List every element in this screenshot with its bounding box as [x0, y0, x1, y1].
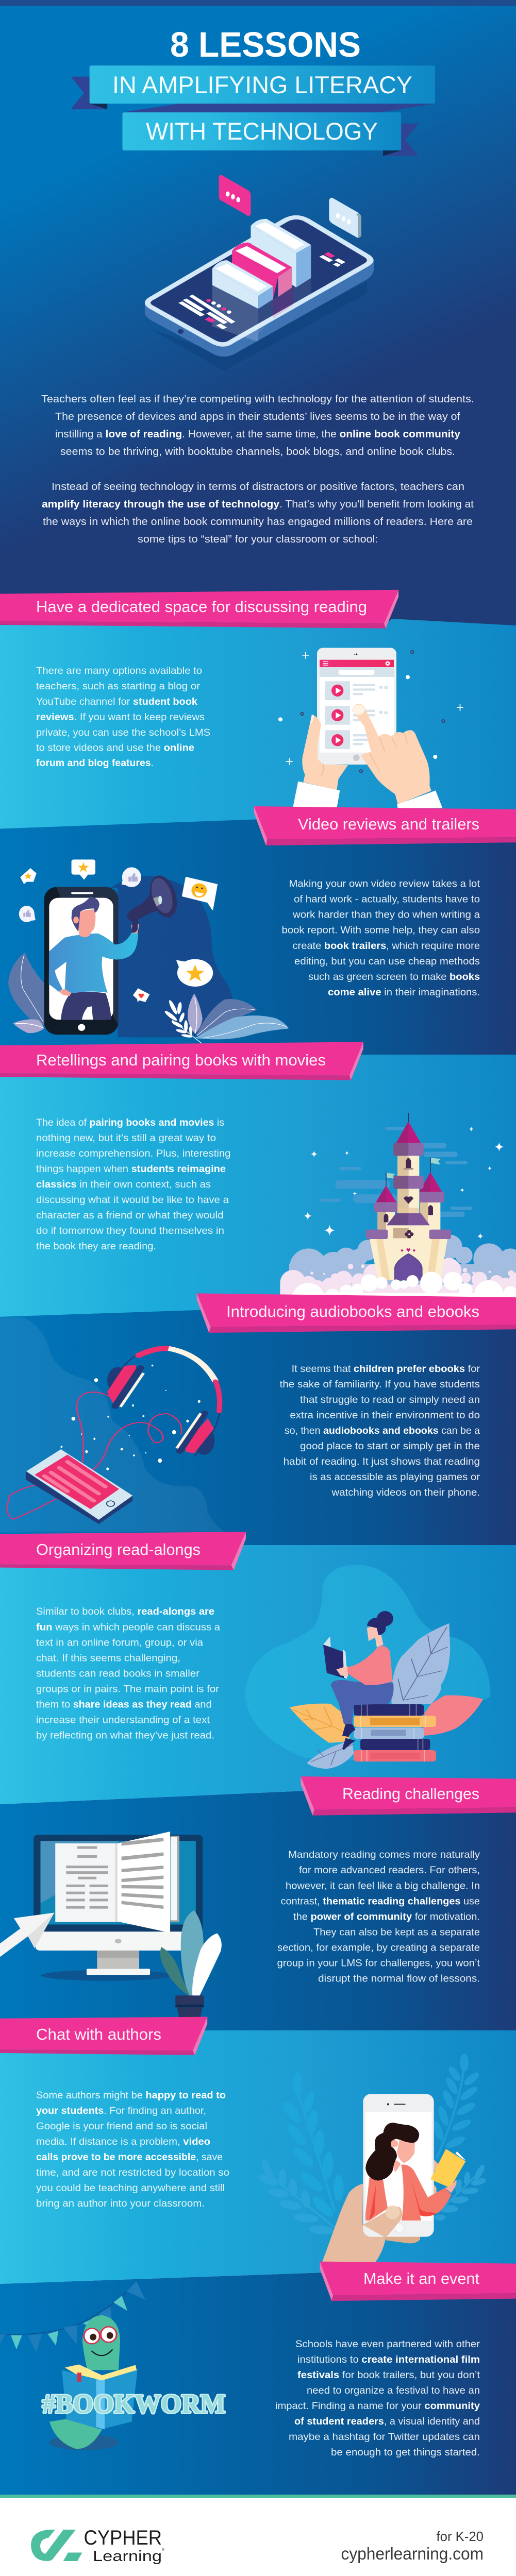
text: video reviews body: such as green screen to make books: [308, 972, 480, 982]
text: video reviews body: come alive in their imaginations.: [328, 987, 480, 998]
text: read-alongs body: by reflecting on what they’ve just read.: [36, 1730, 214, 1741]
text: read-alongs body: Similar to book clubs, read-alongs are: [36, 1606, 214, 1617]
text: make it an event body: impact. Finding a name for your community: [275, 2401, 480, 2412]
heading: introducing audiobooks: Introducing audiobooks and ebooks: [226, 1302, 479, 1320]
heading: reading challenges: Reading challenges: [342, 1785, 479, 1803]
label: bookworm hashtag: #BOOKWORM: [42, 2389, 225, 2419]
text: introduction: some tips to “steal” for your classroom or school:: [138, 534, 378, 545]
text: reading challenges body: however, it can feel like a big challenge. In: [286, 1880, 480, 1892]
logo wordmark: Learning: [93, 2548, 162, 2565]
text: audiobooks body: that struggle to read or simply need an: [300, 1395, 480, 1405]
panel: retellings and pairing books with movies: [0, 1042, 516, 1323]
text: introduction: The presence of devices and apps in their students’ lives seems to be in the way of: [55, 411, 460, 422]
text: audiobooks body: extra incentive in their environment to do: [290, 1410, 480, 1421]
text: dedicated space body: [36, 666, 210, 769]
text: chat with authors body: bring an author into your classroom.: [36, 2198, 205, 2209]
text: video reviews body: create book trailers , which require more: [293, 941, 480, 952]
text: chat with authors body: you could be teaching anywhere and still: [36, 2183, 225, 2194]
text: chat with authors body: media. If distance is a problem, video: [36, 2137, 210, 2147]
icon: heart bubble: [133, 988, 149, 1003]
text: dedicated space body: private, you can use the school’s LMS: [36, 727, 210, 738]
text: introduction: Teachers often feel as if they’re competing with technology for the attention of students.: [41, 394, 474, 405]
panel: footer: [0, 2495, 516, 2576]
banner: reading challenges: [301, 1776, 516, 1816]
text: read-alongs body: fun ways in which people can discuss a: [36, 1622, 220, 1633]
text: read-alongs body: groups or in pairs. The main point is for: [36, 1684, 220, 1695]
text: chat with authors body: time, and are not restricted by location so: [36, 2167, 229, 2178]
text: make it an event body: [275, 2339, 480, 2458]
text: video reviews body: editing, but you can use cheap methods: [294, 956, 480, 967]
text: introduction: instilling a love of reading . However, at the same time, the online book community: [55, 429, 461, 440]
text: video reviews body: [281, 879, 480, 998]
text: read-alongs body: students can read books in smaller: [36, 1668, 200, 1680]
illustration: headphones and phone: [0, 1317, 224, 1532]
banner: chat with authors: [0, 2017, 207, 2055]
banner: make it an event: [320, 2262, 516, 2301]
text: make it an event body: festivals for book trailers, but you don’t: [297, 2370, 480, 2381]
illustration: isometric phone with books: [145, 175, 374, 371]
text: retellings body: character as a friend or what they would: [36, 1210, 224, 1221]
heading: retellings: Retellings and pairing books with movies: [36, 1051, 326, 1069]
text: reading challenges body: section, for example, by creating a separate: [277, 1942, 480, 1954]
banner: have a dedicated space: [0, 590, 398, 629]
text: read-alongs body: increase their understanding of a text: [36, 1715, 210, 1726]
logo icon: [31, 2530, 82, 2561]
banner: video reviews: [254, 806, 516, 845]
banner: organizing read-alongs: [0, 1532, 246, 1570]
text: introduction: [41, 394, 474, 545]
text: dedicated space body: reviews. If you want to keep reviews: [36, 712, 205, 723]
text: retellings body: do if tomorrow they found themselves in: [36, 1226, 224, 1236]
text: video reviews body: book report. With some help, they can also: [281, 925, 480, 936]
panel: video reviews and trailers: [0, 806, 516, 1061]
panel: have a dedicated space for discussing reading: [0, 590, 516, 828]
panel: make it an event: [0, 2262, 516, 2495]
heading: chat with authors: Chat with authors: [36, 2025, 161, 2043]
icon: star bubble: [72, 859, 95, 879]
text: retellings body: nothing new, but it’s still a great way to: [36, 1133, 216, 1144]
banner: retellings: [0, 1042, 363, 1080]
text: retellings body: discussing what it would be like to have a: [36, 1195, 229, 1206]
text: reading challenges body: disrupt the normal flow of lessons.: [318, 1973, 480, 1985]
text: chat with authors body: [36, 2090, 229, 2209]
text: audiobooks body: the sake of familiarity. If you have students: [280, 1379, 480, 1390]
text: reading challenges body: Mandatory reading comes more naturally: [288, 1850, 480, 1860]
icon: like bubble right: [122, 867, 141, 887]
title line 3: WITH TECHNOLOGY: [146, 117, 378, 145]
panel: chat with authors: [0, 2017, 516, 2284]
text: retellings body: The idea of pairing books and movies is: [36, 1117, 224, 1128]
illustration: bookworm with bunting: [0, 2281, 145, 2450]
icon: large star bubble: [176, 959, 213, 987]
text: chat with authors body: Some authors might be happy to read to: [36, 2090, 226, 2101]
text: introduction: Instead of seeing technology in terms of distractors or positive factors, teachers can: [52, 481, 464, 493]
text: introduction: amplify literacy through the use of technology . That’s why you'll benefit from looking at: [42, 499, 474, 510]
text: audiobooks body: habit of reading. It just shows that reading: [284, 1456, 480, 1467]
text: audiobooks body: [280, 1364, 480, 1498]
text: dedicated space body: teachers, such as starting a blog or: [36, 681, 201, 692]
icon: small star bubble: [20, 868, 37, 884]
text: make it an event body: institutions to create international film: [297, 2354, 480, 2365]
text: video reviews body: Making your own video review takes a lot: [289, 879, 480, 889]
text: read-alongs body: chat. If this seems challenging,: [36, 1653, 180, 1664]
panel: reading challenges: [0, 1776, 516, 2035]
illustration: woman reading on book stack: [245, 1565, 490, 1769]
icon: white chat bubble: [329, 198, 361, 238]
icon: like bubble left: [19, 906, 36, 922]
text: make it an event body: need to organize a festival to have an: [307, 2385, 480, 2396]
text: reading challenges body: [277, 1850, 480, 1985]
text: audiobooks body: good place to start or simply get in the: [300, 1441, 480, 1452]
panel: organizing read-alongs: [0, 1532, 516, 1804]
text: read-alongs body: them to share ideas as they read and: [36, 1699, 211, 1710]
text: dedicated space body: to store videos and use the online: [36, 743, 194, 753]
heading: organizing read-alongs: Organizing read-alongs: [36, 1540, 201, 1558]
text: reading challenges body: contrast, thematic reading challenges use: [281, 1896, 480, 1907]
title ribbons: [71, 65, 435, 156]
text: make it an event body: be enough to get things started.: [331, 2447, 480, 2458]
heading: make it an event: Make it an event: [363, 2269, 479, 2287]
logo wordmark: ®: [162, 2548, 165, 2552]
text: audiobooks body: is as accessible as playing games or: [310, 1472, 480, 1483]
text: make it an event body: maybe a hashtag for Twitter updates can: [289, 2432, 480, 2443]
icon: smile bubble: [182, 877, 217, 910]
icon: pink chat bubble: [219, 175, 251, 216]
title line 2: IN AMPLIFYING LITERACY: [112, 71, 412, 98]
heading: video reviews: Video reviews and trailers: [298, 815, 479, 833]
text: retellings body: increase comprehension. Plus, interesting: [36, 1148, 231, 1159]
text: retellings body: the book they are reading.: [36, 1241, 156, 1252]
text: retellings body: classics in their own context, such as: [36, 1179, 211, 1190]
panel: hero header: [0, 0, 516, 639]
text: dedicated space body: There are many options available to: [36, 666, 202, 676]
logo wordmark: [84, 2527, 165, 2565]
text: chat with authors body: your students . For finding an author,: [36, 2106, 206, 2116]
text: audiobooks body: It seems that children prefer ebooks for: [292, 1364, 480, 1375]
text: video reviews body: of hard work - actually, students have to: [294, 894, 480, 905]
illustration: castle on clouds: [280, 1113, 516, 1315]
text: read-alongs body: [36, 1606, 220, 1741]
text: audiobooks body: so, then audiobooks and ebooks can be a: [285, 1426, 480, 1436]
text: chat with authors body: calls prove to be more accessible , save: [36, 2152, 223, 2163]
panel: introducing audiobooks and ebooks: [0, 1293, 516, 1551]
banner: introducing audiobooks: [197, 1293, 516, 1333]
text: video reviews body: work harder than they do when writing a: [292, 910, 480, 920]
illustration: monitor with book and plant: [0, 1832, 222, 2018]
text: chat with authors body: Google is your friend and so is social: [36, 2121, 207, 2132]
illustration: hands holding tablet: [278, 648, 463, 808]
title: 8 lessons: 8 LESSONS: [170, 25, 361, 64]
tagline: for k-20: for K-20: [436, 2529, 484, 2544]
text: reading challenges body: group in your LMS for challenges, you won’t: [277, 1958, 480, 1969]
logo wordmark: CYPHER: [84, 2527, 162, 2549]
text: reading challenges body: They can also be kept as a separate: [313, 1927, 480, 1938]
text: make it an event body: Schools have even partnered with other: [295, 2339, 480, 2350]
text: retellings body: [36, 1117, 231, 1252]
text: make it an event body: of student readers , a visual identity and: [294, 2416, 480, 2427]
text: dedicated space body: YouTube channel for student book: [36, 697, 197, 707]
text: read-alongs body: text in an online forum, group, or via: [36, 1637, 203, 1649]
heading: have a dedicated space: Have a dedicated space for discussing reading: [36, 598, 367, 616]
text: dedicated space body: forum and blog features .: [36, 758, 154, 769]
text: audiobooks body: watching videos on their phone.: [331, 1487, 480, 1498]
website: cypherlearning.com: [341, 2544, 484, 2563]
text: introduction: the ways in which the online book community has engaged millions of readers. Here are: [43, 516, 473, 528]
illustration: woman reading in phone: [257, 2054, 487, 2262]
text: reading challenges body: for more advanced readers. For others,: [299, 1865, 480, 1876]
text: reading challenges body: the power of community for motivation.: [293, 1911, 480, 1923]
text: retellings body: things happen when students reimagine: [36, 1164, 226, 1175]
text: introduction: seems to be thriving, with booktube channels, book blogs, and online book clubs.: [60, 446, 455, 457]
illustration: man with megaphone in phone: [8, 859, 289, 1043]
